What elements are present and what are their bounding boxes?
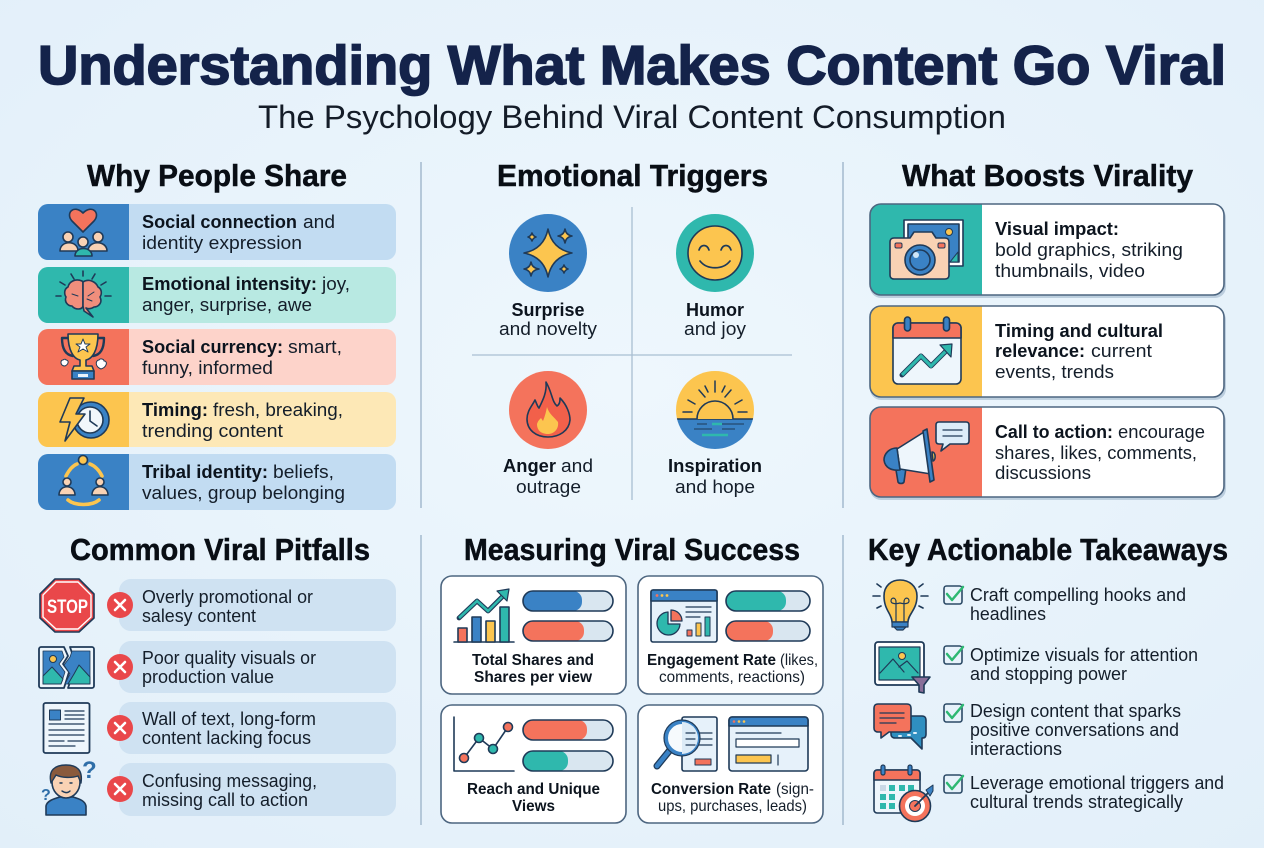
- icon: flame: [509, 371, 587, 449]
- text: surprise: Surprise: [512, 300, 584, 320]
- text: humor: Humor: [686, 300, 744, 320]
- text: hooks: [970, 585, 1186, 624]
- text: visuals: Optimize visuals for attention: [970, 645, 1198, 665]
- text: social connection: Social connection: [142, 212, 297, 232]
- card: timing and cultural relevance: [870, 306, 1226, 400]
- panel: emotional triggers: [472, 158, 792, 500]
- text: anger: and: [561, 456, 593, 476]
- text: timing and cultural relevance: Timing and cultural: [995, 321, 1163, 341]
- icon: line chart: [454, 717, 514, 771]
- icon: x mark: [107, 654, 133, 680]
- text: conversations: [970, 701, 1181, 759]
- pitfall: overly promotional: [40, 579, 396, 632]
- icon: camera and photo: [890, 220, 963, 279]
- label: total shares: Shares per view: [474, 669, 593, 686]
- text: tribal identity: Tribal identity:: [142, 462, 268, 482]
- text: conversations: positive conversations and: [970, 720, 1179, 740]
- card: call to action: [870, 407, 1226, 500]
- panel: measuring viral success: [441, 532, 823, 823]
- text: tribal identity: [142, 462, 345, 503]
- icon: checkbox: [944, 586, 963, 604]
- text: visual impact: Visual impact:: [995, 219, 1119, 239]
- icon: chat bubbles: [874, 704, 926, 749]
- icon: smiley: [676, 214, 754, 292]
- text: social currency: funny, informed: [142, 358, 273, 378]
- takeaway: emotional triggers: [874, 765, 1224, 822]
- text: social connection: identity expression: [142, 233, 302, 253]
- heading: common viral pitfalls: Common Viral Pitfalls: [70, 532, 370, 567]
- text: inspiration: [668, 456, 762, 497]
- card: engagement rate: [638, 576, 823, 694]
- heading: emotional triggers: Emotional Triggers: [497, 158, 768, 193]
- text: inspiration: and hope: [675, 477, 755, 497]
- heading: measuring viral success: Measuring Viral Success: [464, 532, 800, 567]
- icon: sunrise: [676, 371, 754, 451]
- text: poor quality visuals: Poor quality visuals or: [142, 648, 316, 668]
- text: wall of text: Wall of text, long-form: [142, 709, 316, 729]
- label: conversion rate: Conversion Rate: [651, 781, 771, 798]
- icon: confused person: ?: [82, 757, 97, 784]
- card: reach and unique views: [441, 705, 626, 823]
- label: reach and unique views: Views: [512, 798, 555, 815]
- text: call to action: discussions: [995, 463, 1091, 483]
- icon: heart and people: [60, 209, 107, 256]
- text: inspiration: Inspiration: [668, 456, 762, 476]
- icon: x mark: [107, 776, 133, 802]
- subtitle: The Psychology Behind Viral Content Consumption: [258, 99, 1006, 135]
- label: conversion rate: ups, purchases, leads): [658, 798, 807, 815]
- icon: confused person: [41, 757, 97, 815]
- row: timing: [38, 392, 396, 447]
- row: social currency: [38, 329, 396, 385]
- text: emotional triggers: cultural trends strategically: [970, 792, 1183, 812]
- text: timing: [142, 400, 343, 441]
- card: conversion rate: [638, 705, 823, 823]
- progress bars: [726, 591, 810, 641]
- icon: x mark: [107, 592, 133, 618]
- text: visuals: [970, 645, 1198, 684]
- text: humor: [684, 300, 746, 339]
- text: timing and cultural relevance: [995, 321, 1163, 382]
- trigger: surprise: [499, 214, 597, 339]
- icon: broken image: [39, 647, 94, 688]
- text: call to action: encourage: [1118, 422, 1205, 442]
- text: confusing messaging: Confusing messaging,: [142, 771, 317, 791]
- takeaway: visuals: [875, 642, 1198, 693]
- icon: calendar with target: [874, 765, 933, 822]
- text: social connection: and: [303, 212, 335, 232]
- text: poor quality visuals: [142, 648, 316, 687]
- text: anger: outrage: [516, 477, 581, 497]
- card: total shares: [441, 576, 626, 694]
- text: confusing messaging: [142, 771, 317, 810]
- icon: dashboard window: [651, 590, 717, 642]
- label: reach and unique views: Reach and Unique: [467, 781, 600, 798]
- icon: stop sign: [40, 579, 94, 632]
- trigger: humor: [676, 214, 754, 339]
- icon: megaphone and speech bubble: [884, 422, 969, 484]
- icon: image with funnel: [875, 642, 930, 693]
- card: visual impact: [870, 204, 1226, 298]
- text: social currency: [142, 337, 342, 378]
- icon: checkbox: [944, 775, 963, 793]
- label: conversion rate: [651, 781, 814, 815]
- icon: calendar with trend: [893, 317, 961, 384]
- icon: circle of people: [59, 456, 108, 504]
- text: overly promotional: [142, 587, 313, 626]
- takeaway: hooks: [873, 580, 1186, 630]
- text: timing and cultural relevance: events, trends: [995, 362, 1114, 382]
- title: Understanding What Makes Content Go Viral: [38, 34, 1226, 96]
- text: timing: fresh, breaking,: [213, 400, 343, 420]
- text: anger: [503, 456, 593, 497]
- panel: key actionable takeaways: [868, 532, 1228, 822]
- icon: brain: [56, 271, 111, 317]
- label: engagement rate: comments, reactions): [659, 669, 805, 686]
- text: conversations: Design content that sparks: [970, 701, 1181, 721]
- icon: bar chart with arrow: [454, 589, 514, 642]
- panel: common viral pitfalls: [39, 532, 396, 816]
- row: social connection: [38, 204, 396, 260]
- icon: magnifier and document: [657, 717, 717, 771]
- text: conversations: interactions: [970, 739, 1062, 759]
- row: tribal identity: [38, 454, 396, 510]
- text: visual impact: [995, 219, 1183, 281]
- icon: web form window: [729, 717, 808, 771]
- text: timing and cultural relevance: relevance:: [995, 341, 1085, 361]
- text: social connection: [142, 212, 335, 253]
- text: overly promotional: Overly promotional or: [142, 587, 313, 607]
- pitfall: wall of text: [44, 702, 396, 754]
- pitfall: poor quality visuals: [39, 641, 396, 693]
- heading: key actionable takeaways: Key Actionable Takeaways: [868, 532, 1228, 567]
- text: anger: Anger: [503, 456, 556, 476]
- text: hooks: Craft compelling hooks and: [970, 585, 1186, 605]
- text: visuals: and stopping power: [970, 664, 1127, 684]
- row: emotional intensity: [38, 267, 396, 323]
- text: overly promotional: salesy content: [142, 606, 256, 626]
- text: emotional intensity: Emotional intensity:: [142, 274, 317, 294]
- icon: checkbox: [944, 704, 963, 722]
- icon: x mark: [107, 715, 133, 741]
- text: wall of text: content lacking focus: [142, 728, 311, 748]
- label: engagement rate: (likes,: [780, 652, 818, 669]
- text: emotional intensity: joy,: [321, 274, 350, 294]
- text: surprise: and novelty: [499, 319, 597, 339]
- heading: why people share: Why People Share: [87, 158, 347, 193]
- text: hooks: headlines: [970, 604, 1046, 624]
- label: reach and unique views: [467, 781, 600, 815]
- text: emotional intensity: anger, surprise, awe: [142, 295, 312, 315]
- icon: document: [44, 703, 90, 753]
- heading: what boosts virality: What Boosts Virality: [902, 158, 1194, 193]
- text: timing and cultural relevance: current: [1091, 341, 1152, 361]
- icon: sparkles: [509, 214, 587, 292]
- text: poor quality visuals: production value: [142, 667, 274, 687]
- text: emotional triggers: Leverage emotional triggers and: [970, 773, 1224, 793]
- label: engagement rate: [647, 652, 818, 686]
- trigger: anger: [503, 371, 593, 497]
- icon: stop sign: STOP: [47, 597, 88, 618]
- text: timing: trending content: [142, 421, 283, 441]
- panel: what boosts virality: [870, 158, 1226, 500]
- text: tribal identity: beliefs,: [273, 462, 334, 482]
- panel: why people share: [38, 158, 396, 510]
- label: total shares: [472, 652, 594, 686]
- text: confusing messaging: missing call to action: [142, 790, 308, 810]
- icon: checkbox: [944, 646, 963, 664]
- icon: trophy: [61, 334, 106, 379]
- text: emotional intensity: [142, 274, 350, 315]
- trigger: inspiration: [668, 371, 762, 497]
- text: timing: Timing:: [142, 400, 208, 420]
- pitfall: confusing messaging: [41, 757, 396, 816]
- text: call to action: [995, 422, 1205, 483]
- icon: light bulb: [873, 580, 928, 630]
- text: call to action: shares, likes, comments,: [995, 443, 1197, 463]
- text: emotional triggers: [970, 773, 1224, 812]
- takeaway: conversations: [874, 701, 1181, 759]
- text: humor: and joy: [684, 319, 746, 339]
- text: social currency: smart,: [288, 337, 342, 357]
- label: conversion rate: (sign-: [776, 781, 814, 798]
- text: surprise: [499, 300, 597, 339]
- text: tribal identity: values, group belonging: [142, 483, 345, 503]
- icon: confused person: ?: [41, 787, 51, 804]
- text: call to action: Call to action:: [995, 422, 1113, 442]
- progress bars: [523, 591, 613, 641]
- text: social currency: Social currency:: [142, 337, 283, 357]
- label: total shares: Total Shares and: [472, 652, 594, 669]
- progress bars: [523, 720, 613, 771]
- icon: lightning and clock: [60, 398, 109, 441]
- text: visual impact: thumbnails, video: [995, 261, 1145, 281]
- text: wall of text: [142, 709, 316, 748]
- label: engagement rate: Engagement Rate: [647, 652, 776, 669]
- text: visual impact: bold graphics, striking: [995, 240, 1183, 260]
